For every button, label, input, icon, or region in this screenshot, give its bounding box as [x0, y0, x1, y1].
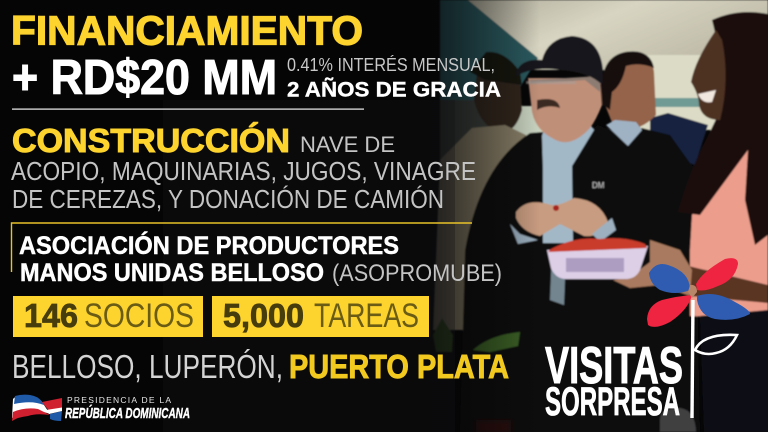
woman hair [678, 12, 768, 245]
face [528, 78, 602, 142]
back man left [474, 58, 522, 132]
bracket line [12, 223, 472, 272]
stat: socios: 146 [24, 297, 78, 334]
stat: socios [13, 296, 203, 337]
stat: tareas: 5,000 [223, 297, 304, 334]
location: PUERTO PLATA [289, 348, 509, 385]
description: NAVE DE [300, 132, 395, 157]
logo: presidencia: PRESIDENCIA DE LA [67, 395, 171, 405]
woman face [691, 30, 726, 120]
block: construccion [11, 122, 476, 214]
icon: flag [12, 395, 62, 421]
block: asociacion: (ASOPROMUBE) [332, 260, 502, 287]
basket [547, 246, 648, 279]
plant [433, 318, 453, 352]
stat: tareas: TAREAS [314, 297, 419, 335]
woman arm [680, 264, 768, 303]
icon: pinwheel flower [647, 258, 750, 418]
stem and leaf [692, 300, 693, 418]
block: asociacion [19, 230, 502, 287]
logo: visitas sorpresa: SORPRESA [545, 380, 680, 424]
amount: + RD$20 MM [12, 51, 277, 105]
logo: visitas sorpresa: VISITAS [545, 337, 683, 395]
photo: visit scene: DM [592, 181, 605, 190]
logo: presidencia [12, 395, 190, 422]
fade overlay [0, 0, 540, 432]
interest: 0.41% INTERÉS MENSUAL, [287, 54, 495, 75]
collar and shirt [542, 118, 594, 243]
block: construccion: ACOPIO, MAQUINARIAS, JUGOS, VINAGRE [11, 158, 476, 186]
back right suit [650, 113, 708, 165]
dim objects [310, 400, 340, 432]
stat: tareas [212, 296, 429, 337]
block: asociacion: ASOCIACIÓN DE PRODUCTORES [19, 230, 399, 260]
hands [516, 198, 608, 236]
grace period: 2 AÑOS DE GRACIA [287, 76, 501, 102]
title word: FINANCIAMIENTO [11, 8, 363, 54]
location: BELLOSO, LUPERÓN, [12, 348, 283, 385]
block: construccion: DE CEREZAS, Y DONACIÓN DE CAMIÓN [12, 185, 444, 214]
heading: financiamiento [11, 8, 501, 105]
man 2 [603, 52, 656, 130]
stat: socios: SOCIOS [84, 297, 194, 335]
construction heading: CONSTRUCCIÓN [12, 122, 290, 159]
location [12, 348, 509, 385]
logo: visitas sorpresa [545, 258, 750, 424]
woman blouse [690, 135, 768, 320]
can bottom [660, 408, 696, 432]
main man jacket [460, 128, 660, 432]
logo: presidencia: REPÚBLICA DOMINICANA [65, 404, 190, 422]
block: asociacion: MANOS UNIDAS BELLOSO [20, 259, 324, 287]
